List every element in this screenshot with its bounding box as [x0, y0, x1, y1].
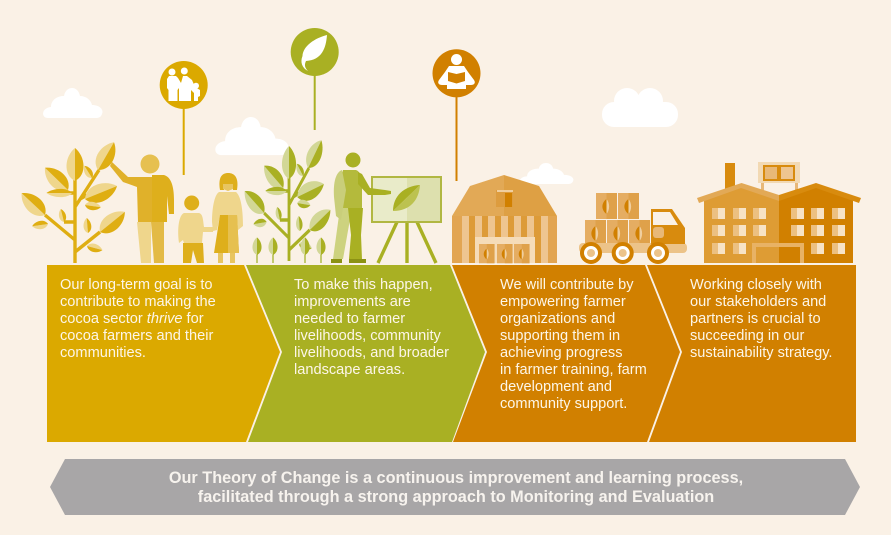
- panel: improvements needed: To make this happen,: [294, 277, 433, 293]
- cloud: far left: [43, 88, 103, 118]
- easel board with leaf: [372, 177, 441, 263]
- panel: improvements needed: improvements are: [294, 294, 411, 310]
- panel: improvements needed: landscape areas.: [294, 362, 405, 378]
- banner: continuous improvement: [50, 459, 860, 515]
- panel: working with stakeholders: partners is crucial to: [690, 311, 821, 327]
- figure: man reaching for leaf: [110, 154, 174, 263]
- panel: long-term goal: cocoa sector thrive for: [60, 311, 204, 327]
- panel: improvements needed: livelihoods, and broader: [294, 345, 449, 361]
- sprouts: [252, 237, 326, 263]
- icon: family pin: [160, 61, 208, 175]
- panel: our contribution: community support.: [500, 396, 627, 412]
- panel: long-term goal: Our long-term goal is to: [60, 277, 212, 293]
- panel: working with stakeholders: Working closely with: [690, 277, 822, 293]
- panel: working with stakeholders: [647, 265, 856, 442]
- panel: working with stakeholders: sustainability strategy.: [690, 345, 832, 361]
- panel: long-term goal: cocoa farmers and their: [60, 328, 213, 344]
- panel: working with stakeholders: our stakeholders and: [690, 294, 826, 310]
- cloud: behind barn: [520, 163, 573, 184]
- barn: [452, 175, 557, 263]
- panel: long-term goal: contribute to making the: [60, 294, 216, 310]
- figure: woman: [212, 173, 243, 263]
- panel: our contribution: organizations and: [500, 311, 615, 327]
- figure: man presenting: [331, 152, 391, 263]
- cloud: right: [602, 88, 678, 127]
- panel: our contribution: in farmer training, farm: [500, 362, 647, 378]
- plant: green: [240, 136, 335, 261]
- panel: working with stakeholders: succeeding in our: [690, 328, 805, 344]
- panel: improvements needed: [246, 265, 485, 442]
- icon: reading person pin: [432, 49, 480, 181]
- panel: our contribution: achieving progress: [500, 345, 622, 361]
- icon: leaf pin: [291, 28, 339, 130]
- panel: improvements needed: livelihoods, community: [294, 328, 442, 344]
- panel: our contribution: development and: [500, 379, 612, 395]
- plant: yellow: [16, 138, 130, 263]
- panel: our contribution: empowering farmer: [500, 294, 626, 310]
- truck: [579, 193, 687, 262]
- panel: our contribution: [452, 265, 680, 442]
- cloud: behind second plant: [215, 117, 288, 155]
- panel: our contribution: supporting them in: [500, 328, 620, 344]
- banner: continuous improvement: facilitated through a strong approach to Monitoring and Evaluation: [198, 488, 714, 506]
- panel: long-term goal: communities.: [60, 345, 146, 361]
- figure: child: [178, 196, 213, 263]
- panel: improvements needed: needed to farmer: [294, 311, 405, 327]
- banner: continuous improvement: Our Theory of Change is a continuous improvement and learning process,: [169, 469, 743, 487]
- factory: [697, 162, 861, 263]
- panel: our contribution: We will contribute by: [500, 277, 634, 293]
- panel: long-term goal: [47, 265, 280, 442]
